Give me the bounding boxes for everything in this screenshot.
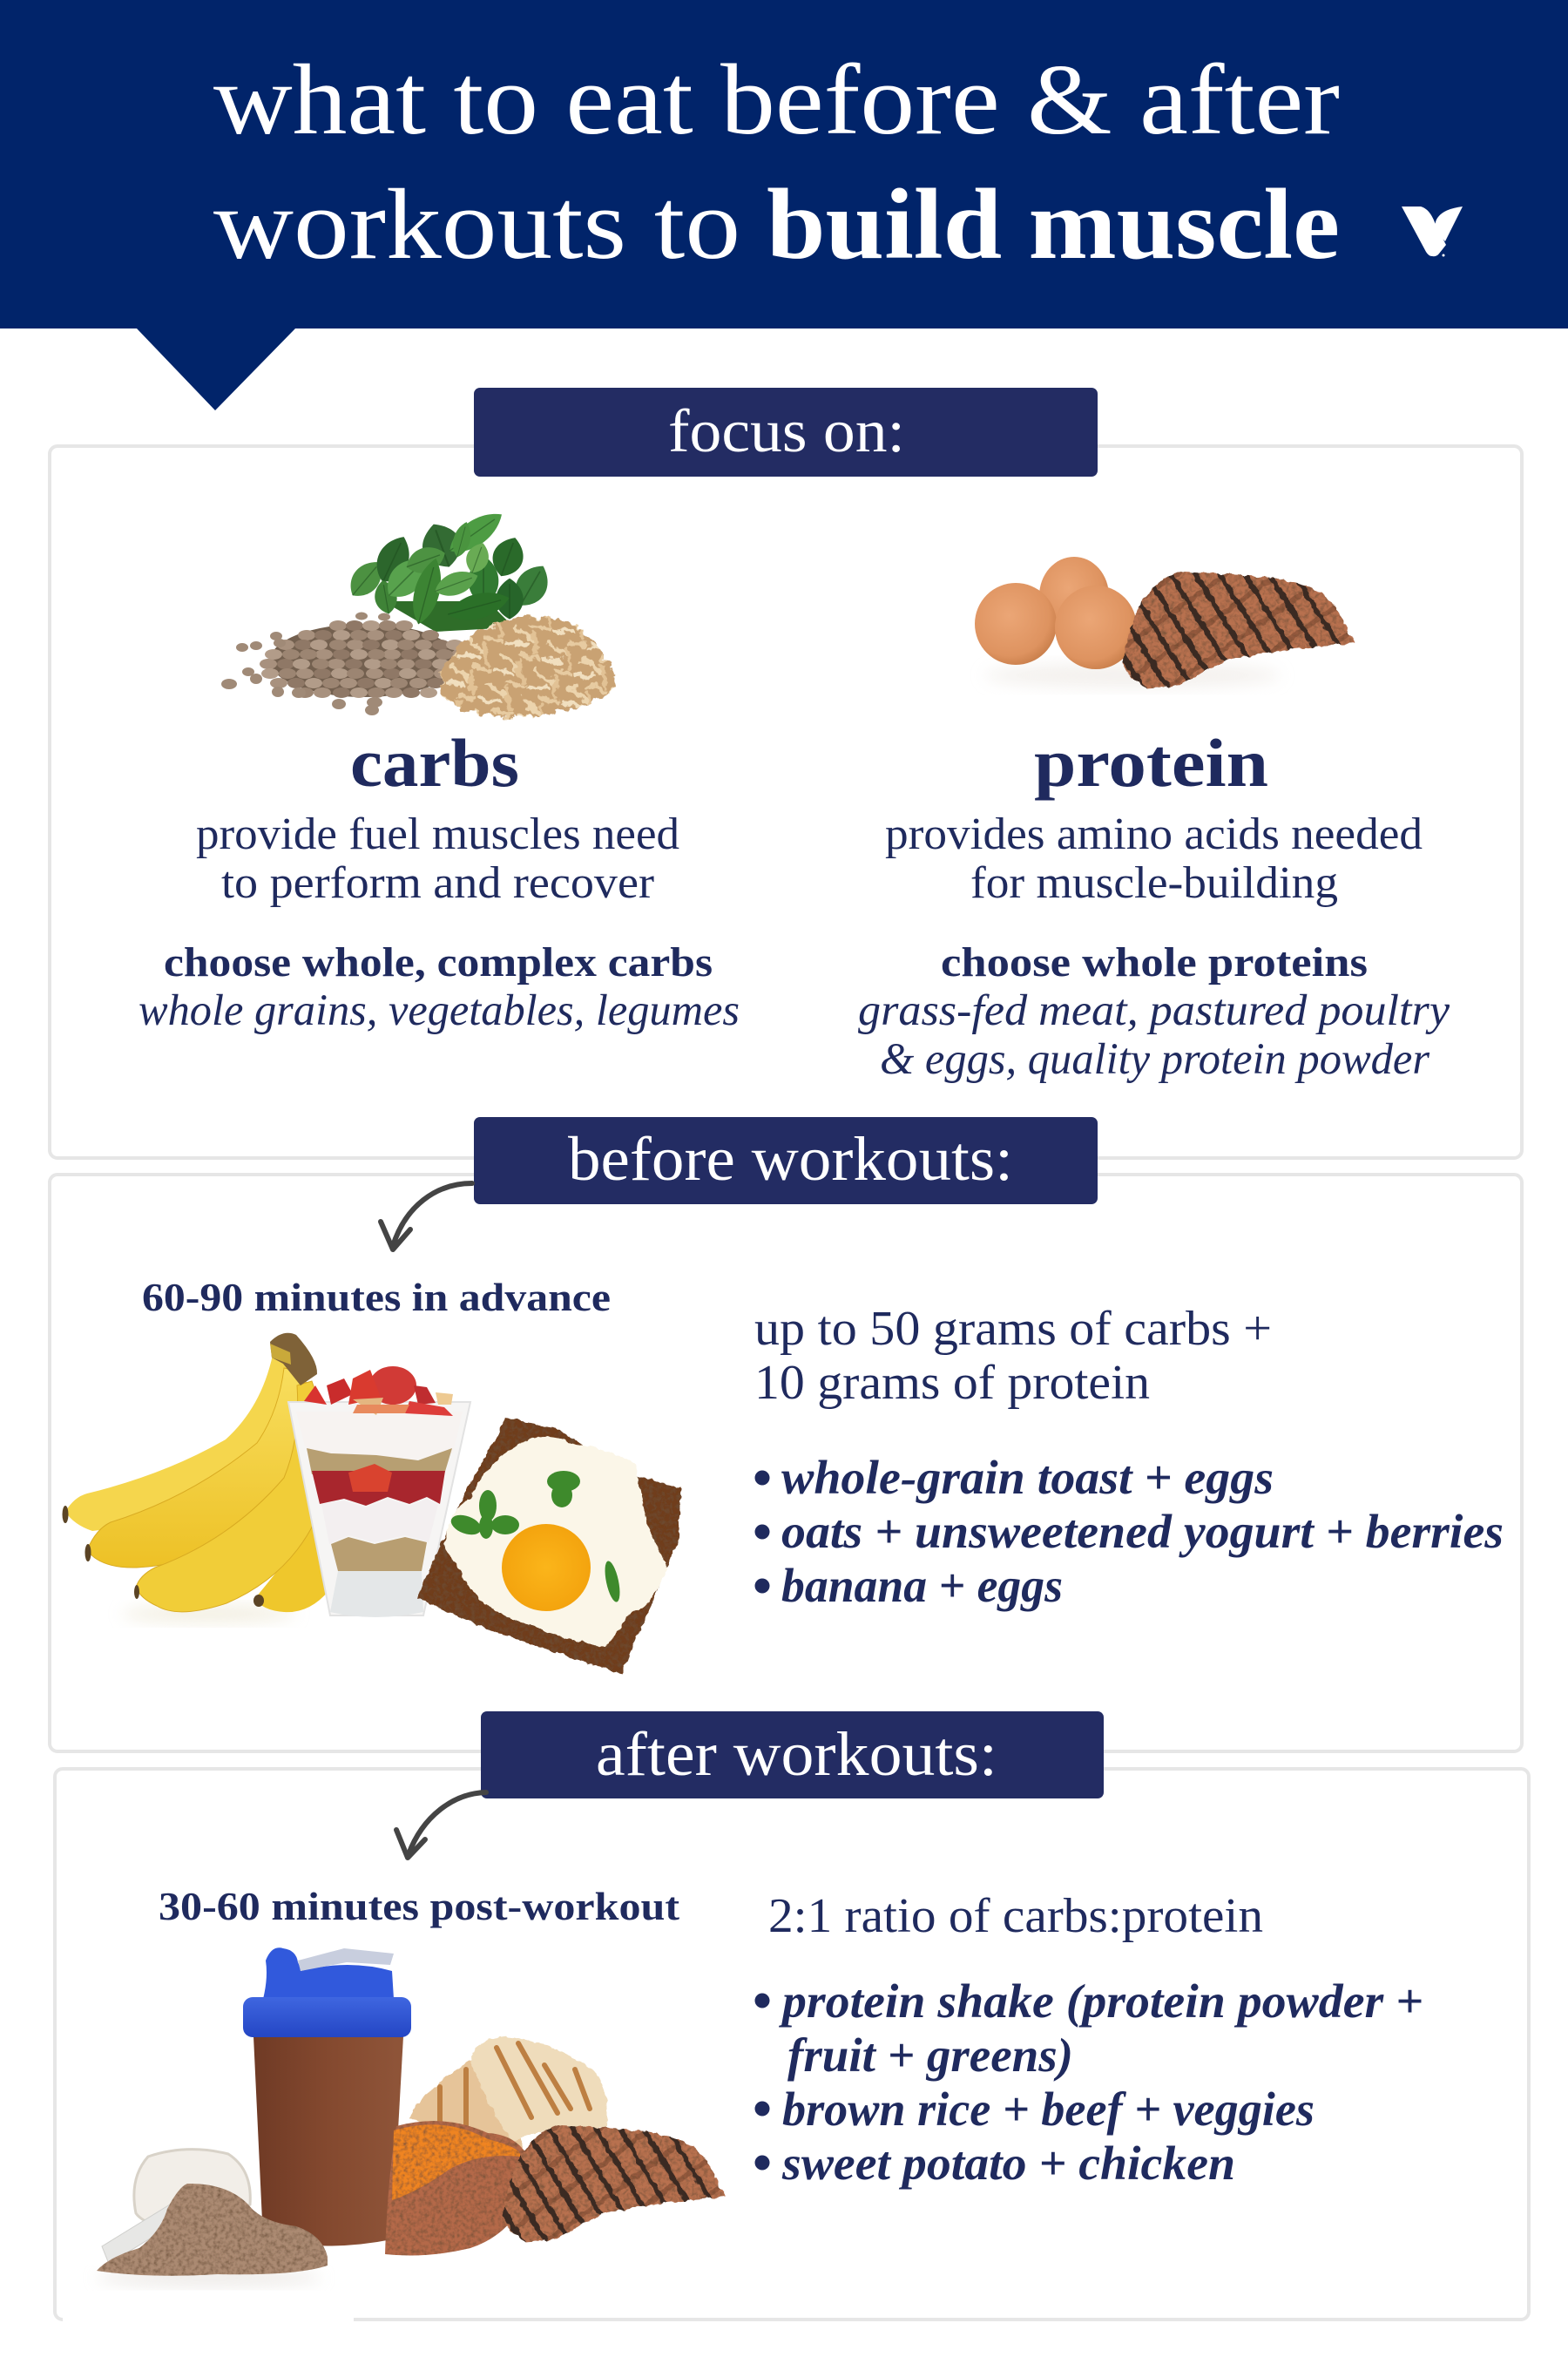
title: [213, 44, 1340, 281]
column: protein: protein: [1034, 725, 1268, 801]
title: build muscle: [767, 169, 1340, 281]
text: before-workout macros: up to 50 grams of carbs +: [754, 1302, 1272, 1356]
heading pill: focus on: focus on:: [668, 398, 905, 465]
column: protein: grass-fed meat, pastured poultry: [858, 986, 1450, 1035]
list: after-workout meals: brown rice + beef + veggies: [782, 2083, 1315, 2136]
list: after-workout meals: sweet potato + chicken: [781, 2137, 1235, 2190]
list: after-workout meals: protein shake (protein powder +: [779, 1974, 1423, 2028]
title: workouts to: [213, 169, 740, 281]
heading pill: focus on: [474, 388, 1098, 477]
column: carbs: whole grains, vegetables, legumes: [139, 986, 740, 1035]
title: what to eat before & after: [213, 44, 1340, 156]
column: carbs: choose whole, complex carbs: [164, 939, 713, 985]
list: before-workout meals: whole-grain toast + eggs: [781, 1451, 1274, 1504]
text: before-workout macros: 10 grams of protein: [754, 1356, 1150, 1410]
heading pill: after workouts: [481, 1711, 1104, 1798]
list: before-workout meals: banana + eggs: [781, 1559, 1063, 1612]
column: protein: choose whole proteins: [941, 939, 1368, 985]
timing label: 60-90 minutes in advance: [142, 1275, 611, 1319]
column: protein: for muscle-building: [970, 858, 1338, 908]
arrow to timing label: [396, 1792, 486, 1858]
list: before-workout meals: [754, 1451, 1504, 1612]
column: carbs: [139, 725, 740, 1035]
list: before-workout meals: oats + unsweetened yogurt + berries: [781, 1505, 1504, 1558]
panel: after workouts: [55, 1711, 1529, 2327]
column: carbs: provide fuel muscles need: [196, 809, 679, 859]
header banner: [0, 0, 1568, 410]
timing label: 30-60 minutes post-workout: [159, 1884, 680, 1928]
column: protein: provides amino acids needed: [885, 809, 1423, 859]
heading pill: before workouts: before workouts:: [568, 1124, 1013, 1194]
column: protein: & eggs, quality protein powder: [880, 1035, 1429, 1084]
heading pill: after workouts: after workouts:: [596, 1719, 997, 1789]
column: protein: [858, 725, 1450, 1084]
icon: eggs and steak: [975, 557, 1355, 688]
column: carbs: to perform and recover: [221, 858, 654, 908]
text: before-workout macros: [754, 1302, 1272, 1410]
panel: focus on: [50, 388, 1522, 1158]
column: carbs: carbs: [350, 725, 519, 801]
icon: banana, parfait and egg toast: [63, 1333, 681, 1674]
list: after-workout meals: fruit + greens): [787, 2029, 1073, 2082]
icon: shaker, powder, chicken, sweet potato and steak: [96, 1947, 725, 2286]
icon: spinach, lentils and rice: [221, 505, 615, 716]
arrow to timing label: [381, 1183, 472, 1250]
icon: brand v logo: [1402, 207, 1463, 256]
banner pointer: [137, 328, 295, 410]
heading pill: before workouts: [474, 1117, 1098, 1204]
panel: before workouts: [50, 1117, 1522, 1751]
text: after-workout ratio: 2:1 ratio of carbs:protein: [768, 1889, 1263, 1943]
list: after-workout meals: [754, 1974, 1423, 2190]
